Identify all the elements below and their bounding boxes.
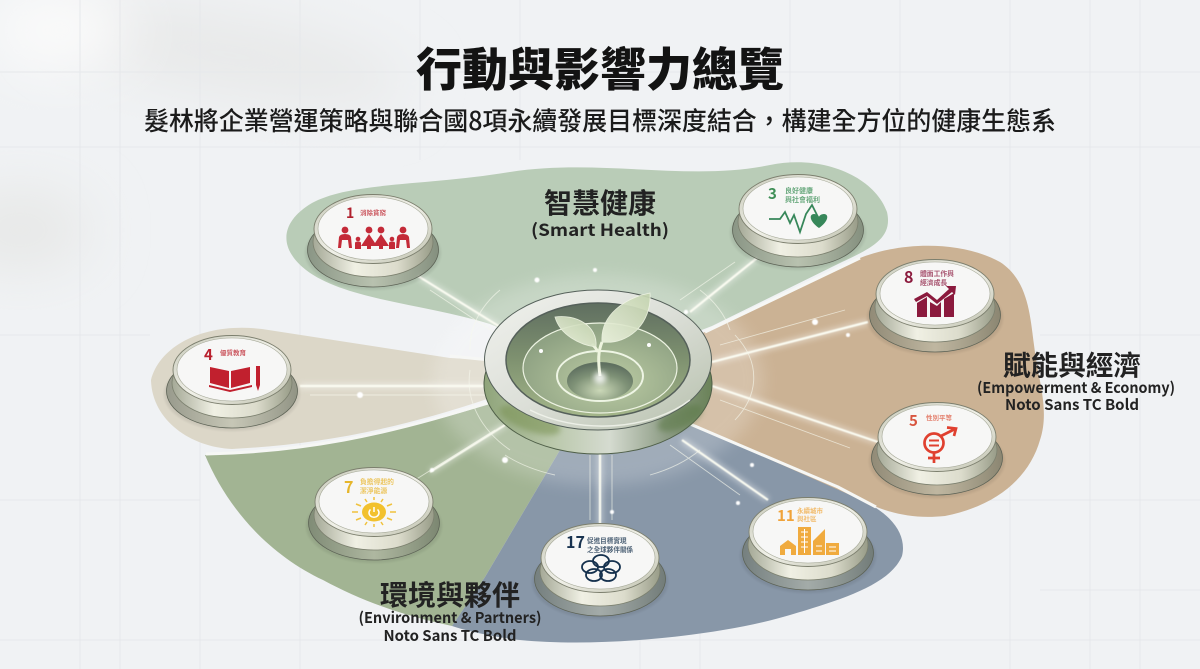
button: SDG 11: 永續城市 [797,505,824,515]
button: SDG 17: 之全球夥伴關係 [587,544,634,554]
button: SDG 4: 4 [204,344,213,365]
heading: empowerment and economy: Noto Sans TC Bold [1005,394,1139,415]
button: SDG 17: 17 [566,529,585,553]
heading: environment and partners: (Environment & Partners) [358,607,542,628]
heading: smart health [531,182,669,241]
sprout [539,293,651,384]
heading: empowerment and economy: (Empowerment & Economy) [977,377,1175,398]
button: SDG 5: 性別平等 [926,412,952,422]
icon: city [780,527,839,555]
separators [206,258,876,507]
heading: environment and partners: Noto Sans TC Bold [384,625,516,646]
region: smart health [286,162,888,370]
heading: environment and partners: 環境與夥伴 [380,574,520,614]
button: SDG 3: 良好健康 [785,186,813,196]
button: SDG 8 [867,260,1003,355]
button: SDG 7 [306,468,442,563]
button: SDG 3: 與社會福利 [785,195,820,205]
button: SDG 17 [532,524,668,619]
button: SDG 17: 促進目標實現 [587,535,627,545]
button: SDG 1: 消除貧窮 [360,207,386,217]
button: SDG 3: 3 [768,183,777,204]
region: blue partners [452,370,903,642]
button: SDG 7: 7 [344,474,353,498]
hub glow [433,275,763,485]
button: SDG 8: 8 [904,264,913,288]
button: SDG 7: 潔淨能源 [360,485,387,495]
icon: heartbeat [769,205,827,232]
button: SDG 1 [305,194,441,290]
heading: smart health: (Smart Health) [531,216,669,241]
button: SDG 5 [869,402,1005,498]
heading: empowerment and economy [977,343,1175,415]
heading: environment and partners [358,574,542,646]
button: SDG 4: 優質教育 [220,347,246,357]
button: SDG 1: 1 [346,203,354,223]
button: SDG 7: 負擔得起的 [360,476,394,486]
button: SDG 4 [164,336,300,431]
central hub with sprout [484,290,712,454]
button: SDG 8: 體面工作與 [920,268,954,278]
button: SDG 11 [740,498,876,593]
title: 行動與影響力總覽 [416,34,784,100]
icon: gender equality [924,428,956,463]
region: empowerment and economy [598,246,1044,517]
button: SDG 3 [730,174,866,270]
icon: book and pencil [209,366,260,392]
icon: family [338,227,410,249]
region: environment and partners [205,370,598,626]
button: SDG 11: 11 [777,505,795,526]
heading: empowerment and economy: 賦能與經濟 [1003,343,1141,383]
icon: flower rings [582,555,620,581]
region: education wedge [151,328,598,449]
button: SDG 11: 與社區 [797,513,817,523]
heading: smart health: 智慧健康 [544,182,656,222]
connector rays [300,258,878,525]
icon: solar power [352,497,396,527]
button: SDG 5: 5 [909,410,918,431]
subtitle: 髮林將企業營運策略與聯合國8項永續發展目標深度結合，構建全方位的健康生態系 [144,101,1056,138]
icon: growth chart [914,286,956,317]
button: SDG 8: 經濟成長 [920,277,947,287]
